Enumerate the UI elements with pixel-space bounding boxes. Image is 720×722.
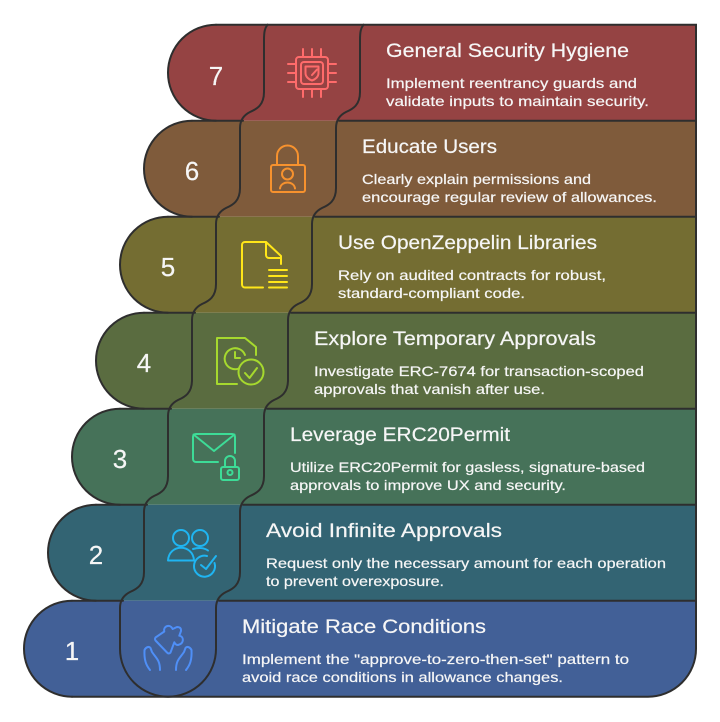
description 6 bbox=[362, 171, 657, 205]
panel fill 6 bbox=[144, 121, 696, 217]
description 7: Implement reentrancy guards and bbox=[386, 75, 637, 91]
number 1: 1 bbox=[65, 636, 79, 666]
panel fill 5 bbox=[120, 217, 696, 313]
description 1 bbox=[242, 651, 629, 685]
title 1: Mitigate Race Conditions bbox=[242, 617, 486, 638]
description 2: to prevent overexposure. bbox=[266, 573, 444, 589]
title 3: Leverage ERC20Permit bbox=[290, 425, 511, 446]
row 7: General Security Hygiene bbox=[168, 25, 696, 121]
description 6: Clearly explain permissions and bbox=[362, 171, 591, 187]
panel fill 4 bbox=[96, 313, 696, 409]
panel fill 3 bbox=[72, 409, 696, 505]
row 4: Explore Temporary Approvals bbox=[96, 313, 696, 409]
icon: hands holding puzzle piece bbox=[144, 626, 192, 670]
row 3: Leverage ERC20Permit bbox=[72, 409, 696, 505]
panel fill 7 bbox=[168, 25, 696, 121]
number 5: 5 bbox=[161, 252, 175, 282]
description 2 bbox=[266, 555, 666, 589]
number 3: 3 bbox=[113, 444, 127, 474]
number 4: 4 bbox=[137, 348, 151, 378]
description 4: Investigate ERC-7674 for transaction-scoped bbox=[314, 363, 644, 379]
description 6: encourage regular review of allowances. bbox=[362, 189, 657, 205]
description 2: Request only the necessary amount for each operation bbox=[266, 555, 666, 571]
row 5: Use OpenZeppelin Libraries bbox=[120, 217, 696, 313]
title 2: Avoid Infinite Approvals bbox=[266, 521, 502, 542]
description 3: approvals to improve UX and security. bbox=[290, 477, 566, 493]
title 7: General Security Hygiene bbox=[386, 41, 629, 62]
icon: document with lines bbox=[242, 242, 287, 288]
description 4: approvals that vanish after use. bbox=[314, 381, 545, 397]
description 7: validate inputs to maintain security. bbox=[386, 93, 649, 109]
description 4 bbox=[314, 363, 644, 397]
icon: shield chip bbox=[288, 49, 336, 97]
title 6: Educate Users bbox=[362, 137, 497, 158]
description 3 bbox=[290, 459, 645, 493]
panel fill 2 bbox=[48, 505, 696, 601]
icon: users with check bbox=[168, 530, 216, 577]
description 1: avoid race conditions in allowance changes. bbox=[242, 669, 563, 685]
title 4: Explore Temporary Approvals bbox=[314, 329, 596, 350]
description 1: Implement the "approve-to-zero-then-set" pattern to bbox=[242, 651, 629, 667]
title 5: Use OpenZeppelin Libraries bbox=[338, 233, 597, 254]
row 1: Mitigate Race Conditions bbox=[24, 601, 696, 697]
icon: envelope with lock bbox=[193, 434, 239, 480]
row 2: Avoid Infinite Approvals bbox=[48, 505, 696, 601]
description 5: standard-compliant code. bbox=[338, 285, 525, 301]
description 3: Utilize ERC20Permit for gasless, signature-based bbox=[290, 459, 645, 475]
number 6: 6 bbox=[185, 156, 199, 186]
number 2: 2 bbox=[89, 540, 103, 570]
description 5 bbox=[338, 267, 606, 301]
panel fill 1 bbox=[24, 601, 696, 697]
icon: padlock with user bbox=[271, 146, 305, 192]
icon: document with clock and check bbox=[217, 338, 264, 384]
number 7: 7 bbox=[209, 61, 223, 91]
row 6: Educate Users bbox=[144, 121, 696, 217]
description 5: Rely on audited contracts for robust, bbox=[338, 267, 606, 283]
description 7 bbox=[386, 75, 649, 109]
